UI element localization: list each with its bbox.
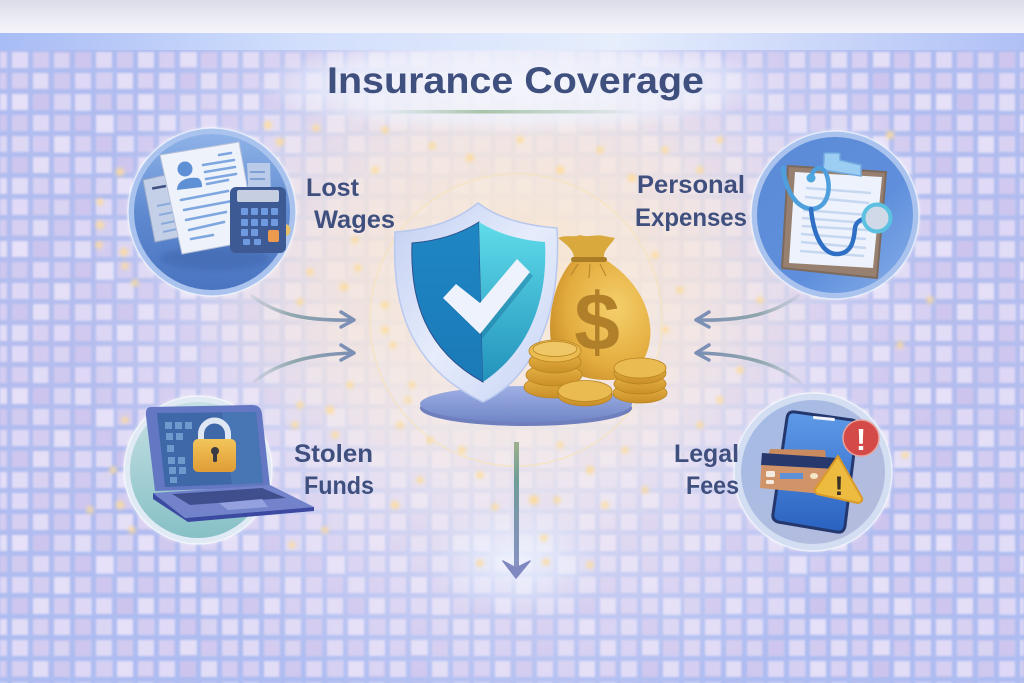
arrow: personal expenses to centre xyxy=(696,296,798,327)
icon: legal fees badge xyxy=(730,389,896,555)
icon: legal fees badge: ! xyxy=(856,422,866,457)
central ring xyxy=(370,174,662,466)
title: Insurance Coverage xyxy=(327,60,704,101)
sparkles: golden bokeh xyxy=(86,121,934,568)
label: stolen funds: Funds xyxy=(304,472,374,500)
label: legal fees: Fees xyxy=(686,472,739,500)
icon: central platform xyxy=(420,386,632,426)
icon: coin stacks xyxy=(524,340,667,406)
label: legal fees: Legal xyxy=(674,440,739,468)
icon: stolen funds badge xyxy=(120,392,314,548)
arrow: lost wages to centre xyxy=(252,296,354,327)
arrow: stolen funds to centre xyxy=(255,345,354,381)
label: lost wages: Lost xyxy=(306,174,360,202)
title underline xyxy=(375,110,645,114)
arrow: legal fees to centre xyxy=(696,345,800,382)
label: stolen funds: Stolen xyxy=(294,440,373,468)
label: lost wages: Wages xyxy=(314,206,395,234)
arrow: downward xyxy=(503,442,530,578)
icon: shield with check mark xyxy=(395,203,558,402)
icon: personal expenses badge xyxy=(747,127,923,303)
label: personal expenses: Personal xyxy=(637,171,745,199)
icon: money bag xyxy=(550,235,650,380)
icon: lost wages badge xyxy=(124,124,300,300)
icon: legal fees badge: ! xyxy=(834,471,844,501)
label: personal expenses: Expenses xyxy=(635,204,747,232)
icon: money bag: $ xyxy=(574,277,620,368)
